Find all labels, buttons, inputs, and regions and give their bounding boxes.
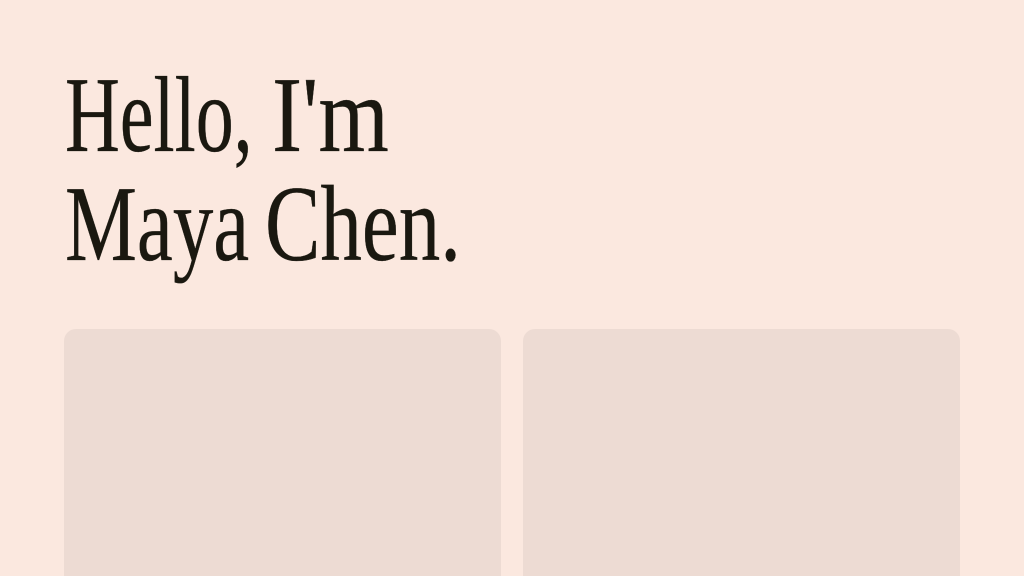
title	[65, 56, 461, 284]
title: Hello,	[65, 56, 253, 175]
title: Chen.	[265, 164, 461, 284]
title: I'm	[272, 56, 388, 175]
title: Maya	[65, 164, 249, 284]
panel: left card	[64, 329, 501, 576]
panel: right card	[523, 329, 960, 576]
